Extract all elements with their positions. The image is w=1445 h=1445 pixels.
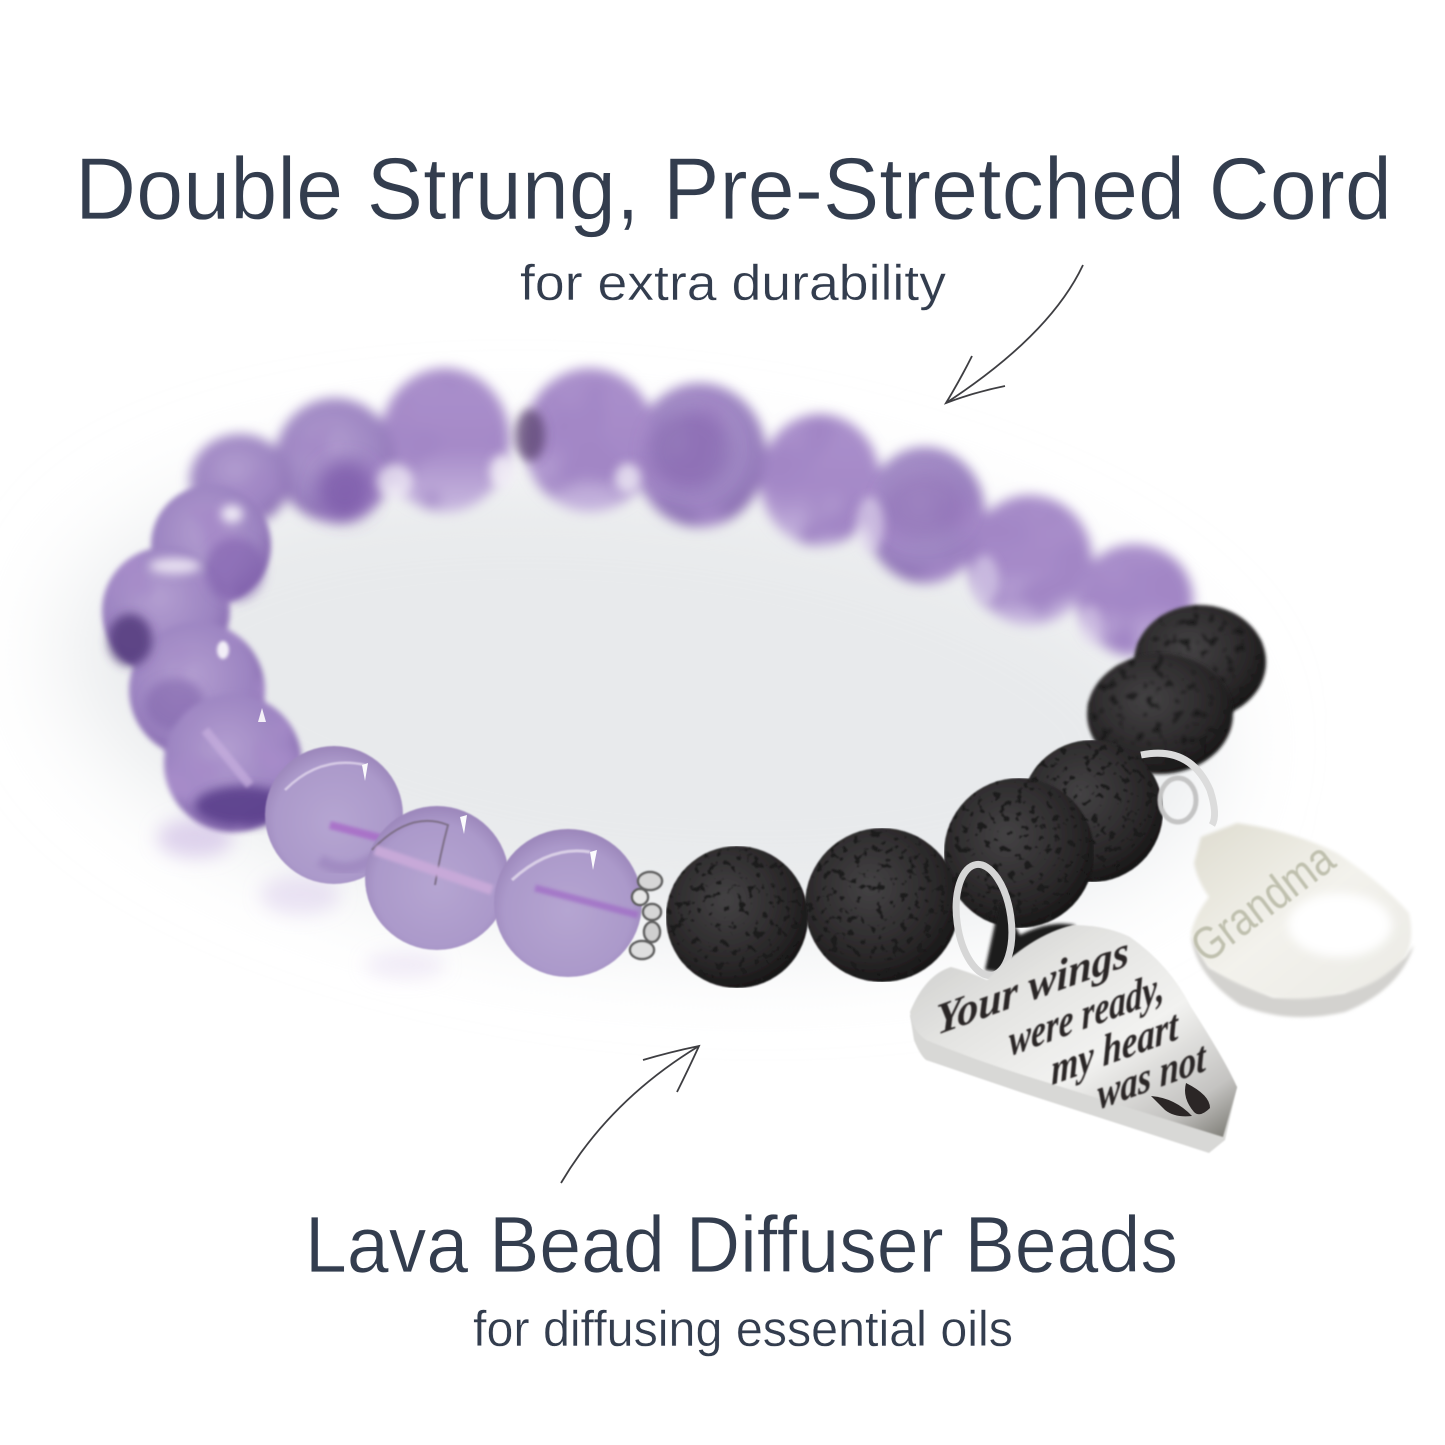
highlight bbox=[1288, 893, 1392, 957]
jump ring bbox=[949, 861, 1019, 979]
bead 13 bbox=[164, 694, 302, 832]
title: cord feature: Double Strung, Pre-Stretched Cord bbox=[75, 139, 1392, 238]
amethyst beads: back row bbox=[190, 368, 1193, 656]
heading: lava beads: Lava Bead Diffuser Beads bbox=[305, 1200, 1178, 1289]
engraved message bbox=[935, 927, 1208, 1120]
back row glints and dark core bbox=[377, 409, 1102, 645]
engraved name: Grandma bbox=[1181, 832, 1344, 973]
subtitle: lava beads: for diffusing essential oils bbox=[473, 1301, 1013, 1357]
engraved message: was not bbox=[1097, 1032, 1208, 1120]
rear charm edge bbox=[1191, 935, 1414, 1017]
arrow: to lava beads bbox=[561, 1046, 699, 1183]
lava beads bbox=[666, 605, 1266, 988]
rear charm face bbox=[1191, 823, 1411, 999]
subtitle: cord feature: for extra durability bbox=[520, 255, 946, 311]
bracelet photo bbox=[102, 368, 1414, 1153]
bead 16 bbox=[494, 829, 642, 977]
lava bead 3 bbox=[944, 778, 1094, 928]
bead 14 bbox=[265, 746, 403, 884]
engraved message: were ready, bbox=[1008, 962, 1165, 1066]
arrow: to cord bbox=[946, 265, 1083, 403]
charm side edge bbox=[910, 1015, 1237, 1153]
amethyst beads: left curve bbox=[102, 485, 271, 758]
icon: angel wings bbox=[1151, 1083, 1210, 1116]
rear jump ring bbox=[1141, 753, 1215, 825]
lava bead 1 bbox=[666, 846, 808, 988]
engraved message: my heart bbox=[1050, 1000, 1180, 1095]
lava bead 2 bbox=[805, 828, 959, 982]
back row colour patches bbox=[317, 410, 967, 539]
lava fragment behind charm bbox=[985, 900, 1075, 975]
amethyst beads: front curve bbox=[164, 694, 642, 977]
small inner ring bbox=[1160, 778, 1196, 822]
bead 15 bbox=[365, 806, 509, 950]
lava bead 4 bbox=[1021, 740, 1163, 882]
engraved message: Your wings bbox=[935, 927, 1130, 1045]
rear heart charm: Grandma bbox=[1141, 753, 1414, 1017]
bead reflections bbox=[157, 818, 445, 979]
soft grey surface shadow bbox=[44, 406, 1236, 994]
lava bead 6 bbox=[1134, 605, 1266, 719]
charm face bbox=[910, 925, 1237, 1137]
front heart charm bbox=[910, 861, 1237, 1153]
silver spacer bead bbox=[630, 872, 662, 959]
lava bead 5 bbox=[1087, 654, 1233, 774]
